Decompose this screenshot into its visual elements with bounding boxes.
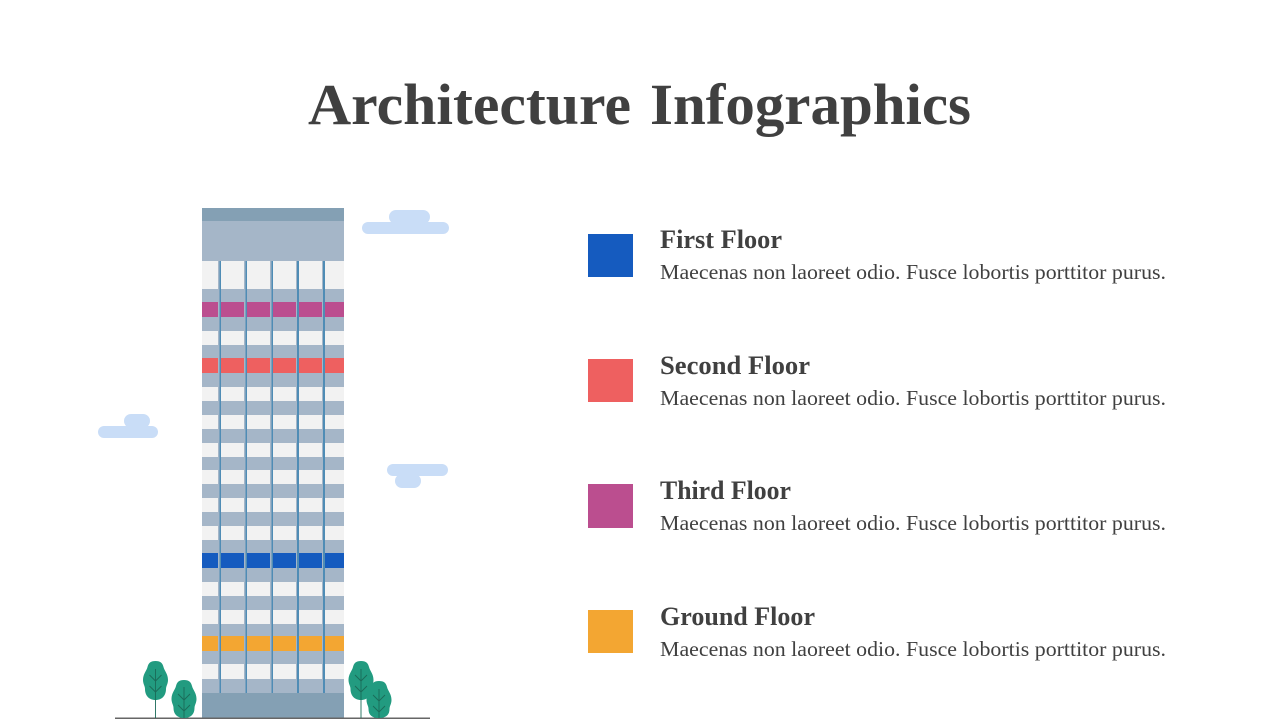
description: second floor: Maecenas non laoreet odio. Fusce lobortis porttitor purus.: [660, 386, 1166, 410]
building base: [202, 693, 344, 718]
windows: white rows lower: [202, 582, 344, 624]
ground line: [115, 718, 430, 719]
tree 4: [366, 681, 392, 718]
cloud: left: [98, 414, 158, 438]
tree 3: [348, 661, 374, 718]
cloud: right: [387, 464, 448, 488]
vertical mullions: [220, 261, 325, 693]
swatch: second floor: [588, 359, 633, 402]
illustration: building with trees and clouds: [98, 208, 449, 719]
windows: white row: [202, 331, 344, 345]
swatch: third floor: [588, 484, 633, 528]
title: [308, 72, 971, 137]
description: ground floor: Maecenas non laoreet odio. Fusce lobortis porttitor purus.: [660, 637, 1166, 661]
legend item: second floor: [588, 351, 1166, 410]
legend item: first floor: [588, 225, 1166, 284]
windows: ground floor row: [202, 636, 344, 651]
title: Architecture: [308, 72, 631, 137]
heading: third floor: Third Floor: [660, 476, 791, 505]
windows: bottom white row: [202, 664, 344, 679]
cloud: top right: [362, 210, 449, 234]
legend item: third floor: [588, 476, 1166, 535]
windows: second floor row: [202, 358, 344, 373]
heading: second floor: Second Floor: [660, 351, 810, 380]
windows: third floor row: [202, 302, 344, 317]
windows: first floor row: [202, 553, 344, 568]
title: Infographics: [650, 72, 971, 137]
building: [202, 208, 344, 718]
heading: first floor: First Floor: [660, 225, 782, 254]
legend item: ground floor: [588, 602, 1166, 661]
heading: ground floor: Ground Floor: [660, 602, 815, 631]
description: first floor: Maecenas non laoreet odio. Fusce lobortis porttitor purus.: [660, 260, 1166, 284]
swatch: first floor: [588, 234, 633, 277]
tree 2: [172, 680, 196, 718]
windows: white rows middle: [202, 387, 344, 540]
windows: tall top row: [202, 261, 344, 289]
swatch: ground floor: [588, 610, 633, 653]
tree 1: [143, 661, 168, 718]
description: third floor: Maecenas non laoreet odio. Fusce lobortis porttitor purus.: [660, 511, 1166, 535]
